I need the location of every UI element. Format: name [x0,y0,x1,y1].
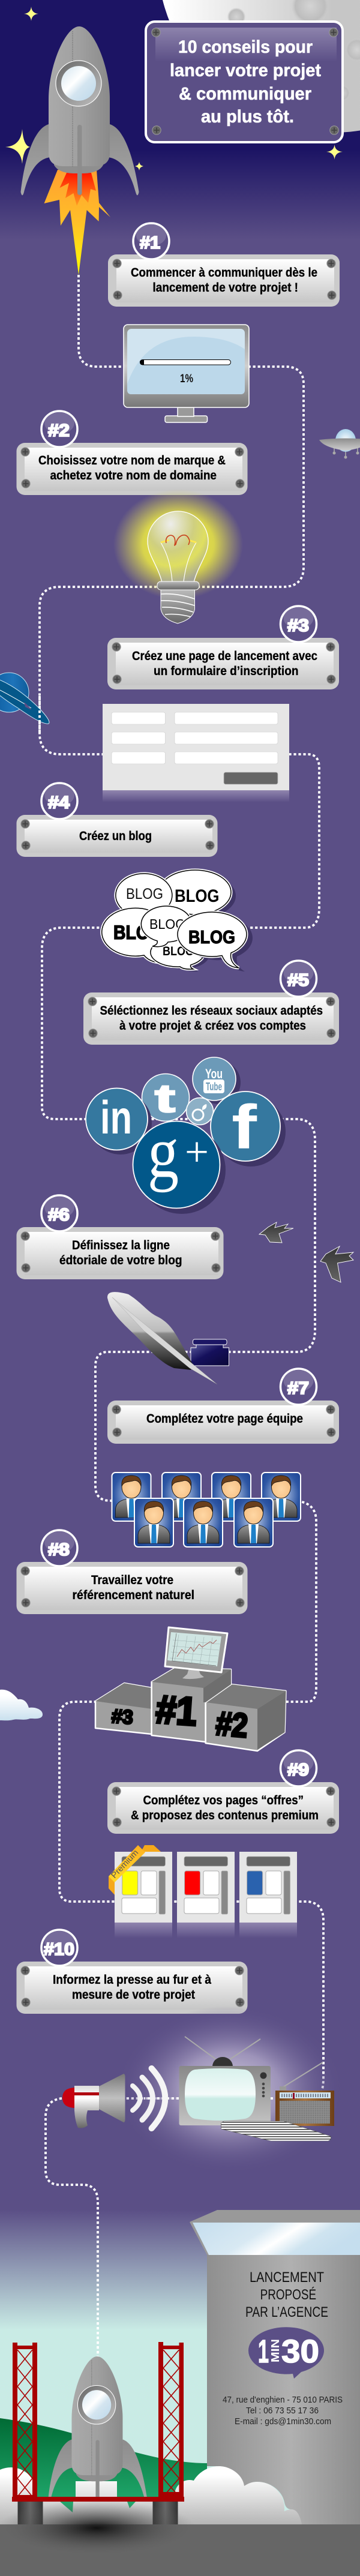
card 1 text [131,266,317,295]
card 3 text: un formulaire d’inscription [154,664,299,678]
card 4 text: Créez un blog [79,829,152,843]
icon: facebook: f [232,1093,257,1162]
card 1 text: Commencer à communiquer dès le [131,266,317,280]
bubble left heavy: BLOG [113,922,163,943]
badge 7: #7 [287,1379,309,1398]
badge 8: #8 [48,1540,70,1560]
card 3 [107,606,339,689]
bubble left heavy [102,908,169,962]
launch tower [12,2342,184,2524]
building [190,2210,360,2524]
dotted route line [40,275,323,2356]
media glow [116,2006,344,2174]
title text [170,37,321,127]
card 6 text: Définissez la ligne [72,1238,170,1252]
card 10 [17,1930,247,2014]
icon: youtube [193,1057,241,1104]
logo 1min30: 1 [258,2334,269,2370]
social network icons [86,1057,286,1214]
agency contact: 47, rue d'enghien - 75 010 PARIS [223,2395,343,2405]
icon: ink bottle [191,1339,229,1366]
icon: cloud [0,1690,43,1720]
icon: twitter [142,1074,190,1121]
card 5 text: Séléctionnez les réseaux sociaux adaptés [100,1004,323,1018]
card 2 text [38,454,226,482]
icon: planet [0,673,49,724]
smoke clouds [0,2466,307,2539]
badge 2: #2 [48,421,70,440]
badge 3: #3 [287,616,309,635]
icon: megaphone [62,2074,125,2128]
badge 6 [41,1195,77,1231]
card 5 text: à votre projet & créez vos comptes [119,1019,306,1033]
card 8 text: référencement naturel [72,1588,194,1602]
block 1: #1 [155,1687,199,1734]
title sign [146,22,343,142]
badge 1 [133,223,169,259]
premium ribbon: Premium [109,1848,140,1880]
badge 3 [281,606,317,642]
badge 9 [281,1750,317,1786]
team portraits [112,1473,301,1547]
bubble back right: BLOG [175,886,220,906]
logo 1min30: MIN [269,2339,281,2362]
card 2 text: achetez votre nom de domaine [50,469,217,482]
card 6 text [59,1238,182,1267]
building text: PAR L’AGENCE [245,2304,328,2320]
card 1 [108,223,340,307]
icon: feather quill [107,1292,217,1384]
icon: ufo [319,429,360,458]
badge 5: #5 [287,971,309,990]
icon: viadeo [186,1098,214,1124]
card 5 text [100,1004,323,1033]
speech bubbles: blog [102,870,253,971]
icon: television [179,2037,271,2125]
icon: google plus: g [148,1112,179,1193]
icon: youtube: Tube [206,1081,222,1093]
card 7 text: Complétez votre page équipe [146,1412,303,1426]
card 4 [17,783,217,857]
card 9 text [131,1794,319,1822]
logo 1min30: 30 [281,2334,319,2370]
building text: LANCEMENT [250,2269,324,2286]
agency contact: Tel : 06 73 55 17 36 [246,2406,319,2416]
badge 10: #10 [44,1940,74,1959]
block 2: #2 [214,1704,250,1744]
bubble front right: BLOG [188,926,235,947]
hill [0,2418,207,2502]
icon: youtube: You [205,1066,223,1081]
card 10 text: mesure de votre projet [72,1988,195,2002]
card 9 text: Complétez vos pages “offres” [143,1794,304,1807]
card 1 text: lancement de votre projet ! [152,281,298,295]
badge 8 [41,1530,77,1566]
agency contact: E-mail : gds@1min30.com [235,2416,331,2427]
icon: radio [275,2062,334,2126]
badge 4: #4 [48,793,70,812]
title text: 10 conseils pour [178,37,313,57]
card 2 [17,411,247,495]
offer page red [177,1852,235,1938]
block 2 [206,1684,286,1751]
icon: monitor with progress bar [124,325,249,422]
podium with computer [95,1627,286,1751]
launch scene [0,2418,307,2539]
building text: PROPOSÉ [260,2287,316,2303]
computer with chart [165,1627,227,1679]
icon: bird 1 [259,1222,293,1243]
card 3 text: Créez une page de lancement avec [132,649,317,663]
card 7 [107,1369,339,1444]
card 8 text [72,1573,194,1602]
card 9 [107,1750,339,1834]
block 3 [95,1683,152,1734]
bubble middle: BLOG [149,916,185,932]
ground [0,2500,360,2576]
icon: light bulb [113,489,243,623]
rocket [20,26,139,196]
card 6 text: édtoriale de votre blog [59,1253,182,1267]
offer page blue [239,1852,297,1938]
icon: bird 2 [320,1246,353,1282]
card 9 text: & proposez des contenus premium [131,1809,319,1822]
badge 2 [41,411,77,447]
badge 4 [41,783,77,819]
bubble front right [178,912,253,971]
card 2 text: Choisissez votre nom de marque & [38,454,226,467]
logo 1min30 [248,2327,324,2379]
card 5 [83,961,339,1045]
block 3: #3 [111,1705,134,1728]
title text: lancer votre projet [170,61,321,80]
badge 6: #6 [48,1205,70,1225]
card 8 text: Travaillez votre [91,1573,173,1587]
icon: facebook [211,1091,286,1166]
icon: sound waves [133,2068,165,2128]
agency contact [223,2395,343,2427]
card 8 [17,1530,247,1614]
badge 9: #9 [287,1761,309,1780]
badge 7 [281,1369,317,1405]
card 6 [17,1195,223,1279]
block 1 [152,1668,231,1742]
building text [245,2269,328,2320]
premium ribbon [109,1845,145,1882]
icon: linkedin: in [100,1091,132,1144]
bubble back left [116,874,172,919]
badge 5 [281,961,317,997]
card 10 text [53,1973,211,2002]
bubble middle [141,906,191,947]
premium ribbon back [109,1845,161,1896]
icon: google plus [133,1112,226,1214]
title text: au plus tôt. [201,107,294,127]
rocket on launch pad [49,2356,147,2500]
badge 1: #1 [140,233,160,253]
card 10 text: Informez la presse au fur et à [53,1973,211,1987]
form illustration [103,704,289,802]
bubble lower: BLOG [163,944,194,958]
icon: twitter: t [155,1076,175,1120]
icon: newspaper [221,2121,331,2141]
title text: & communiquer [179,84,311,104]
bubble lower [151,938,209,971]
bubble back left: BLOG [126,886,163,902]
rocket flames [44,170,110,275]
card 3 text [132,649,317,678]
bubble back right [159,870,236,918]
offer page yellow [115,1852,172,1938]
icon: google plus: + [185,1129,209,1175]
stars [5,7,343,170]
icon: linkedin [86,1088,152,1154]
badge 10 [41,1930,77,1966]
icon: monitor with progress bar: 1% [180,373,193,385]
moon [157,0,360,133]
